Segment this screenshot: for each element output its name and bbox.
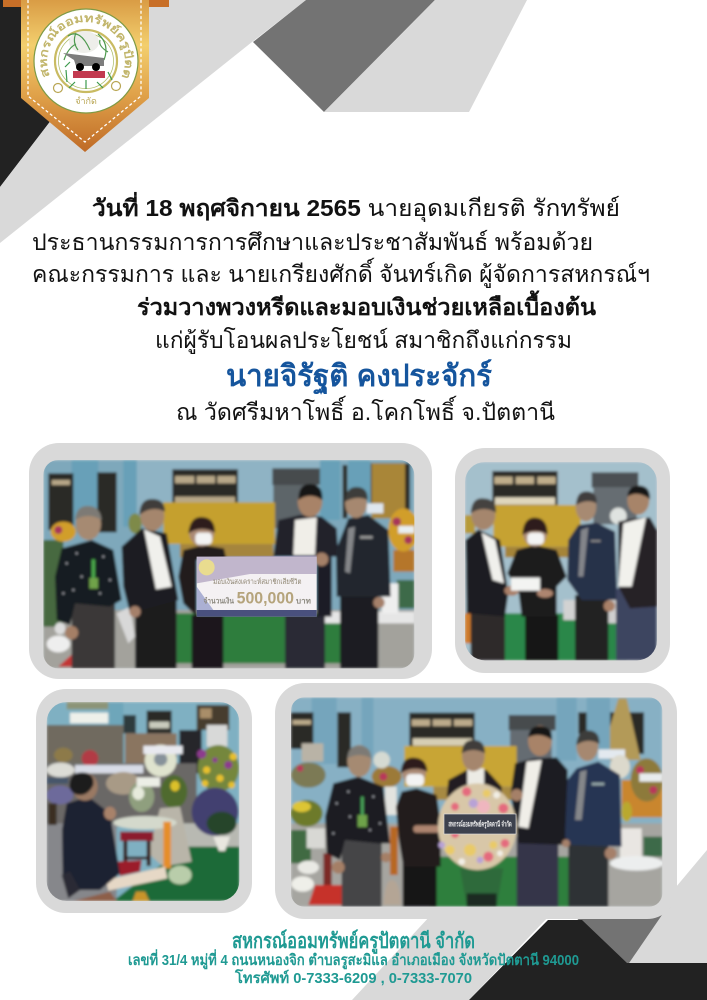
person 2 woman	[396, 758, 443, 907]
footer: organisation name: สหกรณ์ออมทรัพย์ครูปัตตานี จำกัด	[232, 929, 475, 955]
cheque board: 500,000	[237, 588, 294, 607]
envelope	[511, 578, 540, 591]
person woman	[507, 518, 567, 660]
text: date and chair name: วันที่ 18 พฤศจิกายน 2565 นายอุดมเกียรติ รักทรัพย์	[92, 191, 620, 222]
logo: round seal: จำกัด	[75, 96, 97, 106]
text: committee line: คณะกรรมการ และ นายเกรียงศักดิ์ จันทร์เกิด ผู้จัดการสหกรณ์ฯ	[32, 257, 650, 288]
background: top black triangle	[0, 0, 143, 187]
text: activity line: ร่วมวางพวงหรีดและมอบเงินช่วยเหลือเบื้องต้น	[137, 290, 596, 320]
badge: cooperative logo ribbon	[3, 0, 169, 152]
background: bottom right black shape	[469, 920, 707, 1000]
footer: telephone: โทรศัพท์ 0-7333-6209 , 0-7333-7070	[234, 968, 472, 987]
cheque board: มอบเงินสงเคราะห์สมาชิกเสียชีวิต	[213, 577, 302, 586]
text: venue line: ณ วัดศรีมหาโพธิ์ อ.โคกโพธิ์ จ.ปัตตานี	[176, 395, 555, 425]
background: top grey diagonal band	[0, 0, 306, 243]
person grey hair	[567, 491, 617, 660]
person 3 behind wreath	[447, 740, 502, 797]
text: role line: ประธานกรรมการการศึกษาและประชาสัมพันธ์ พร้อมด้วย	[32, 229, 593, 255]
footer contact block	[128, 929, 579, 987]
man kneeling	[62, 772, 120, 898]
background: top dark grey shape	[253, 0, 435, 112]
cheque board	[197, 555, 317, 617]
cheque board: จำนวนเงิน	[203, 596, 234, 605]
photo frame 3: man paying respects	[36, 689, 252, 913]
person 4	[273, 484, 338, 668]
person 2	[122, 499, 178, 668]
footer: address: เลขที่ 31/4 หมู่ที่ 4 ถนนหนองจิก ตำบลรูสะมิแล อำเภอเมือง จังหวัดปัตตานี 94000	[128, 949, 579, 970]
person 5	[336, 487, 391, 668]
person 4	[511, 725, 568, 907]
person black hair	[616, 485, 657, 660]
photo frame 4: wreath presentation	[275, 683, 677, 919]
heading text block	[32, 191, 650, 425]
person 1	[55, 506, 122, 668]
cheque board: บาท	[296, 596, 311, 605]
wreath sign	[444, 814, 516, 834]
background: bottom right light grey shapes	[352, 850, 707, 1000]
person 1 dotted shirt	[325, 745, 391, 907]
person 5	[562, 730, 622, 907]
wreath sign: สหกรณ์ออมทรัพย์ครูปัตตานี จำกัด	[448, 820, 512, 830]
wreath flowers	[438, 783, 517, 907]
text: beneficiary line: แก่ผู้รับโอนผลประโยชน์ สมาชิกถึงแก่กรรม	[155, 327, 572, 354]
photo frame 1: cheque presentation	[29, 443, 432, 679]
logo: round seal	[33, 8, 139, 114]
person 3	[178, 517, 227, 668]
background: top light grey shape	[324, 0, 527, 112]
person left	[466, 498, 519, 660]
background: bottom right dark grey triangle	[570, 912, 664, 966]
photo frame 2: envelope handover	[455, 448, 670, 673]
text: deceased member name: นายจิรัฐติ คงประจักร์	[226, 359, 492, 396]
